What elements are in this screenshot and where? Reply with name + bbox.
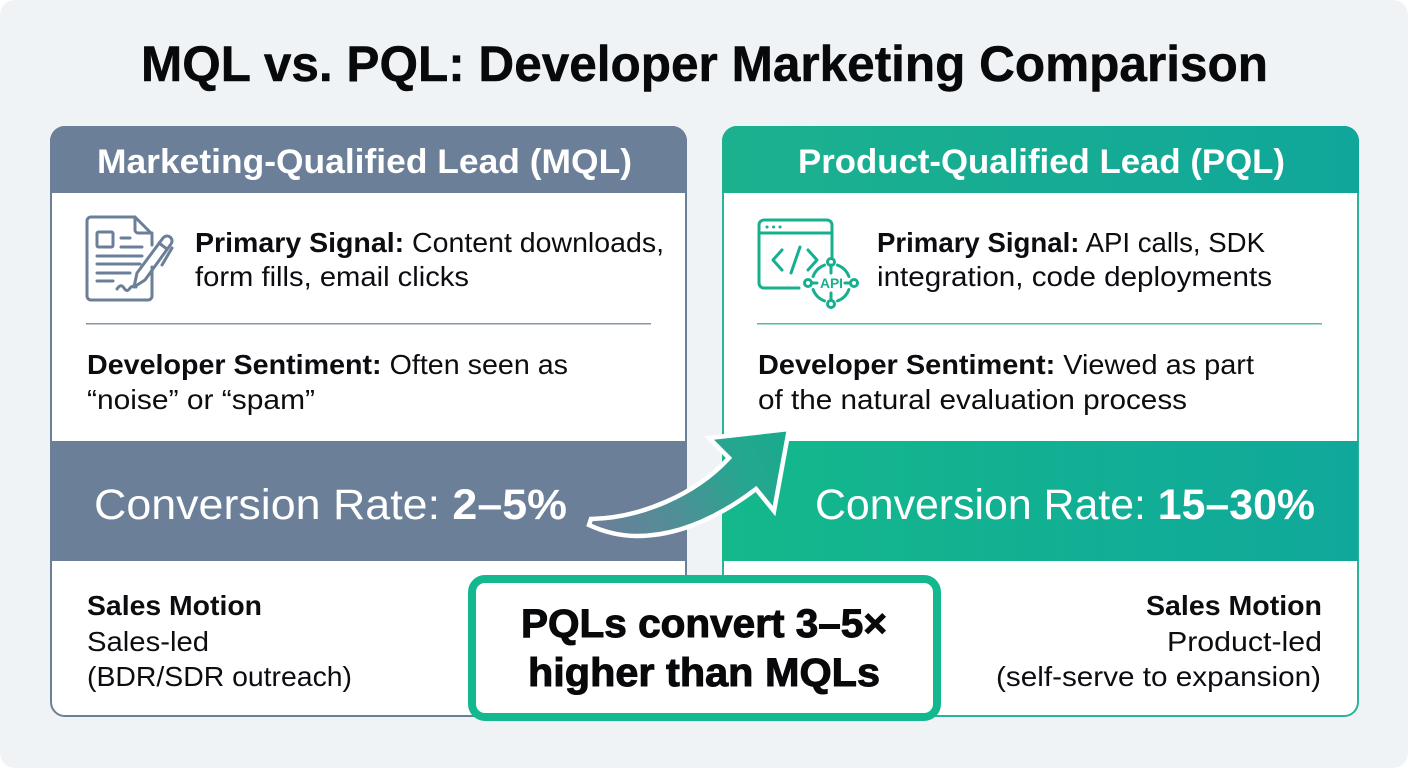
panel: PQL bbox=[722, 126, 1359, 716]
icon: API code window bbox=[759, 220, 858, 308]
sales motion: (BDR/SDR outreach) bbox=[87, 661, 352, 692]
primary signal: form fills, email clicks bbox=[195, 261, 469, 292]
header band bbox=[50, 126, 687, 193]
primary signal: Primary Signal: API calls, SDK bbox=[877, 227, 1265, 258]
developer sentiment: “noise” or “spam” bbox=[87, 384, 315, 415]
callout: PQLs convert 3–5× bbox=[521, 602, 887, 646]
sales motion: Sales-led bbox=[87, 626, 209, 657]
conversion rate: Conversion Rate: 2–5% bbox=[94, 481, 567, 529]
conversion band bbox=[50, 441, 686, 561]
title: MQL vs. PQL: Developer Marketing Comparison bbox=[141, 36, 1268, 92]
primary signal bbox=[195, 227, 664, 292]
developer sentiment bbox=[87, 349, 568, 415]
icon: API code window: API bbox=[820, 275, 843, 291]
conversion rate: Conversion Rate: 15–30% bbox=[815, 481, 1315, 529]
heading: Marketing-Qualified Lead (MQL) bbox=[97, 143, 632, 181]
conversion band bbox=[722, 441, 1358, 561]
sales motion bbox=[996, 590, 1322, 692]
developer sentiment: Developer Sentiment: Often seen as bbox=[87, 349, 568, 380]
primary signal: integration, code deployments bbox=[877, 261, 1272, 292]
icon: document with pen bbox=[87, 217, 172, 300]
sales motion: Sales Motion bbox=[87, 590, 262, 621]
panel: MQL bbox=[50, 126, 687, 716]
primary signal: Primary Signal: Content downloads, bbox=[195, 227, 664, 258]
sales motion: Sales Motion bbox=[1146, 590, 1322, 621]
sales motion: Product-led bbox=[1167, 626, 1322, 657]
developer sentiment: of the natural evaluation process bbox=[758, 384, 1187, 415]
callout: higher than MQLs bbox=[528, 651, 880, 695]
panel body bbox=[51, 127, 686, 716]
callout bbox=[472, 579, 937, 717]
primary signal bbox=[877, 227, 1272, 292]
header band bbox=[722, 126, 1359, 193]
developer sentiment: Developer Sentiment: Viewed as part bbox=[758, 349, 1254, 380]
panel body bbox=[723, 127, 1358, 716]
heading: Product-Qualified Lead (PQL) bbox=[798, 143, 1285, 181]
developer sentiment bbox=[758, 349, 1254, 415]
arrow bbox=[589, 429, 789, 536]
sales motion bbox=[87, 590, 352, 692]
sales motion: (self-serve to expansion) bbox=[996, 661, 1321, 692]
